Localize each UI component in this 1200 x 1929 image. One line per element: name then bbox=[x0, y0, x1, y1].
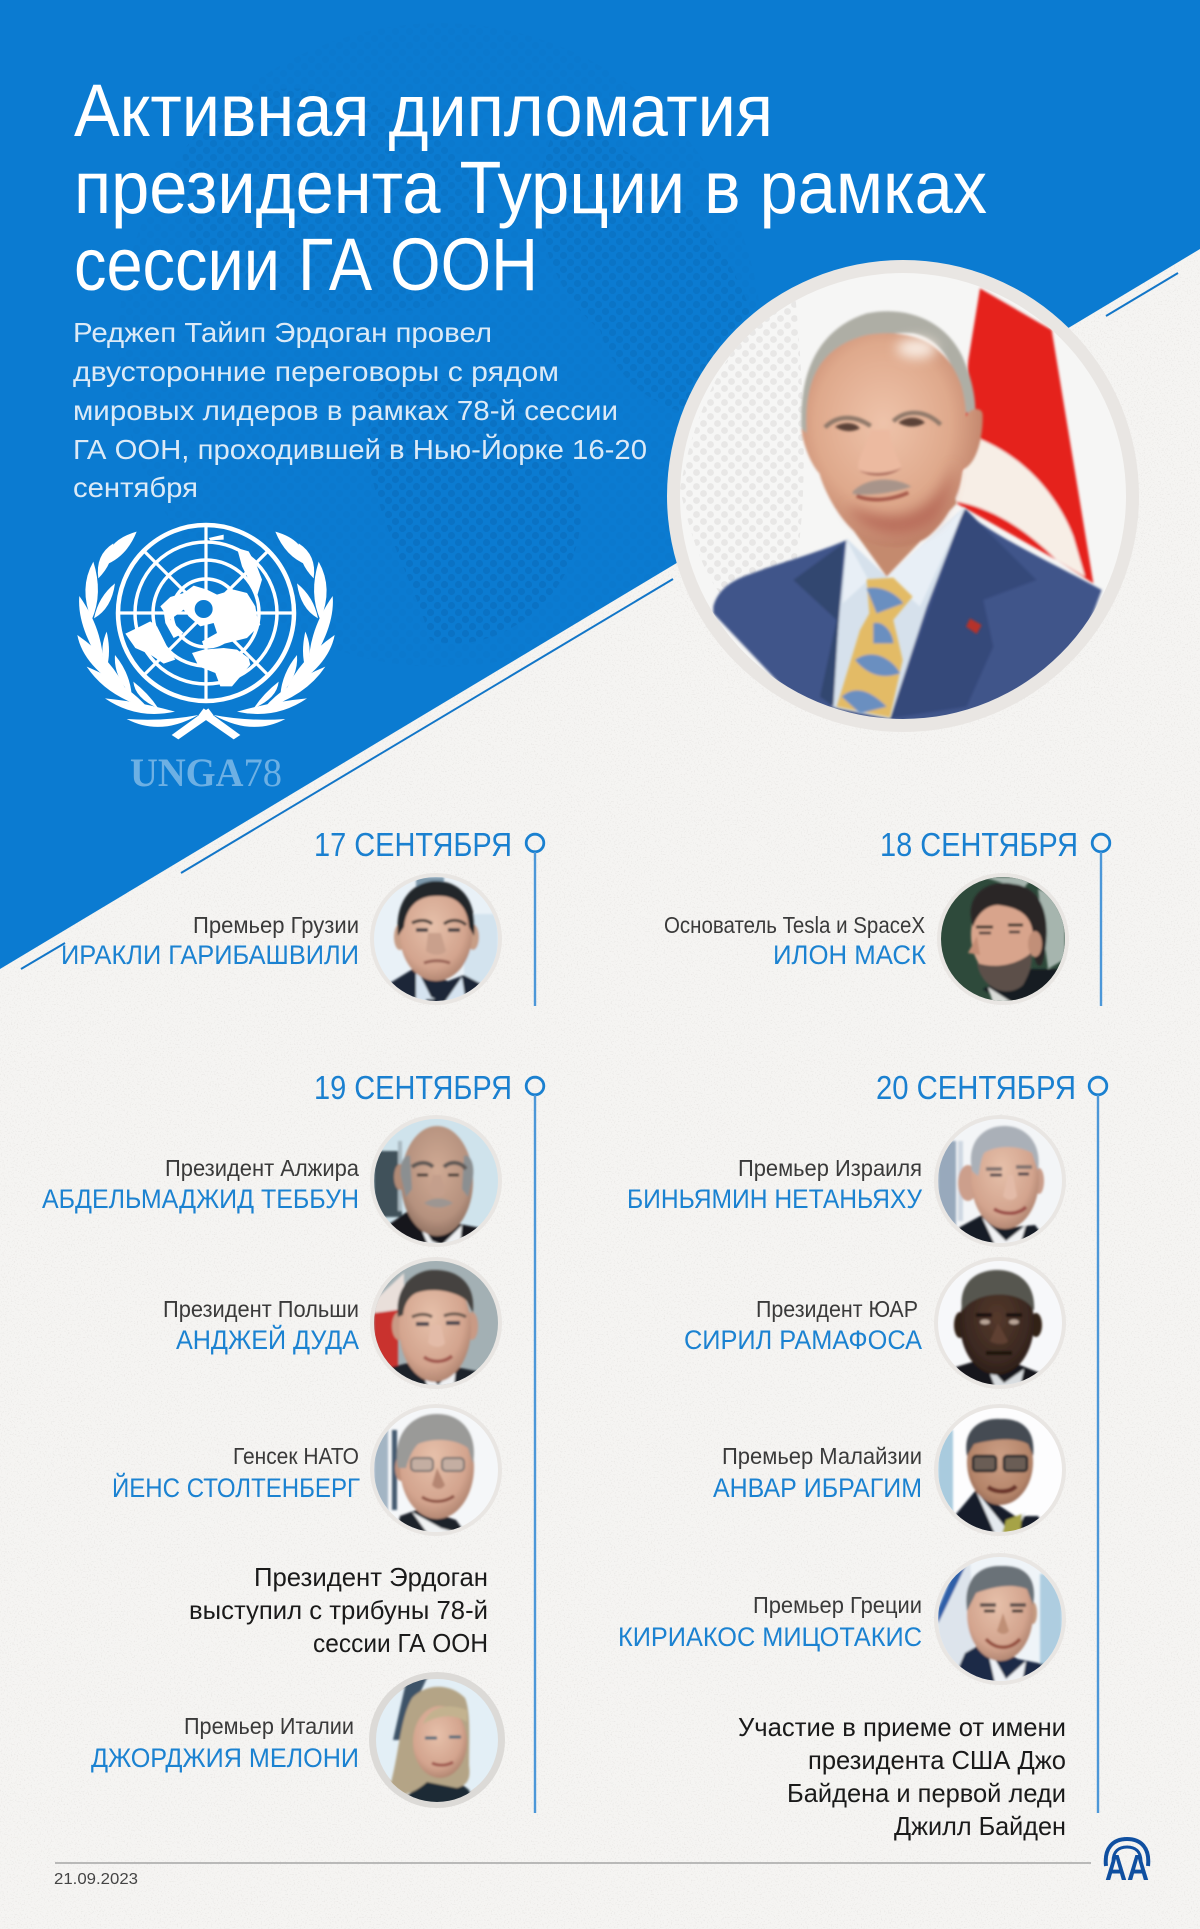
date: 17 September: 17 СЕНТЯБРЯ bbox=[314, 826, 512, 863]
UNGA78 label: UNGA78 bbox=[130, 750, 282, 795]
entry: Anwar Ibrahim bbox=[713, 1404, 1066, 1536]
entry: Duda: АНДЖЕЙ ДУДА bbox=[176, 1324, 359, 1355]
text: Biden reception: Участие в приеме от имени bbox=[738, 1712, 1066, 1742]
icon: AA logo: AA bbox=[1105, 1847, 1149, 1888]
subtitle bbox=[73, 317, 647, 503]
footer date: 21.09.2023 bbox=[54, 1871, 138, 1888]
title: Активная дипломатия bbox=[74, 69, 773, 152]
entry: Ramaphosa bbox=[684, 1257, 1066, 1389]
entry: Ramaphosa: Президент ЮАР bbox=[756, 1296, 918, 1322]
title: президента Турции в рамках bbox=[74, 146, 987, 229]
portrait: Erdogan bbox=[667, 260, 1139, 733]
entry: Mitsotakis: КИРИАКОС МИЦОТАКИС bbox=[618, 1622, 922, 1652]
entry: Meloni: Премьер Италии bbox=[184, 1713, 354, 1739]
entry: Meloni: ДЖОРДЖИЯ МЕЛОНИ bbox=[91, 1743, 359, 1773]
icon: UN emblem bbox=[77, 525, 335, 739]
text: Biden reception: Джилл Байден bbox=[894, 1811, 1066, 1841]
text: Biden reception: президента США Джо bbox=[808, 1745, 1066, 1775]
entry: Musk bbox=[664, 873, 1069, 1005]
dotted globe background bbox=[183, 88, 749, 644]
entry: Tebboune: АБДЕЛЬМАДЖИД ТЕББУН bbox=[42, 1184, 359, 1214]
entry: Garibashvili: Премьер Грузии bbox=[193, 912, 359, 938]
entry: Meloni bbox=[91, 1672, 505, 1808]
entry: Duda: Президент Польши bbox=[163, 1296, 359, 1322]
entry: Netanyahu: БИНЬЯМИН НЕТАНЬЯХУ bbox=[627, 1184, 923, 1214]
title bbox=[74, 69, 987, 306]
text: Biden reception: Байдена и первой леди bbox=[787, 1778, 1066, 1808]
subtitle: сентября bbox=[73, 472, 198, 503]
entry: Netanyahu: Премьер Израиля bbox=[738, 1155, 922, 1181]
date: 18 September: 18 СЕНТЯБРЯ bbox=[880, 826, 1078, 863]
entry: Ramaphosa: СИРИЛ РАМАФОСА bbox=[684, 1325, 922, 1355]
entry: Tebboune bbox=[42, 1115, 502, 1247]
subtitle: ГА ООН, проходившей в Нью-Йорке 16-20 bbox=[73, 434, 647, 465]
date: 20 September bbox=[876, 1069, 1107, 1813]
date: 19 September: 19 СЕНТЯБРЯ bbox=[314, 1069, 512, 1106]
subtitle: двусторонние переговоры с рядом bbox=[73, 356, 559, 387]
entry: Stoltenberg bbox=[112, 1404, 502, 1536]
entry: Garibashvili: ИРАКЛИ ГАРИБАШВИЛИ bbox=[61, 940, 359, 970]
entry: Netanyahu bbox=[627, 1115, 1066, 1247]
entry: Garibashvili bbox=[61, 873, 502, 1005]
entry: Anwar Ibrahim: АНВАР ИБРАГИМ bbox=[713, 1473, 922, 1503]
footer rule bbox=[55, 1862, 1091, 1864]
subtitle: Реджеп Тайип Эрдоган провел bbox=[73, 317, 492, 348]
entry: Musk: Основатель Tesla и SpaceX bbox=[664, 912, 925, 938]
entry: Duda bbox=[163, 1257, 502, 1389]
text: Erdogan UN speech: Президент Эрдоган bbox=[254, 1562, 488, 1592]
date: 17 September bbox=[314, 826, 544, 1006]
text: Erdogan UN speech bbox=[189, 1562, 488, 1658]
entry: Stoltenberg: ЙЕНС СТОЛТЕНБЕРГ bbox=[112, 1472, 360, 1503]
accent lines bbox=[21, 273, 1178, 969]
entry: Musk: ИЛОН МАСК bbox=[773, 940, 926, 970]
blue diagonal header panel bbox=[0, 0, 1200, 969]
entry: Mitsotakis bbox=[618, 1553, 1066, 1685]
subtitle: мировых лидеров в рамках 78-й сессии bbox=[73, 395, 618, 426]
entry: Tebboune: Президент Алжира bbox=[165, 1155, 359, 1181]
entry: Mitsotakis: Премьер Греции bbox=[753, 1592, 922, 1618]
date: 20 September: 20 СЕНТЯБРЯ bbox=[876, 1069, 1076, 1106]
title: сессии ГА ООН bbox=[74, 223, 538, 306]
text: Erdogan UN speech: выступил с трибуны 78-й bbox=[189, 1595, 488, 1625]
text: Biden reception bbox=[738, 1712, 1066, 1841]
entry: Stoltenberg: Генсек НАТО bbox=[233, 1443, 359, 1469]
entry: Anwar Ibrahim: Премьер Малайзии bbox=[722, 1443, 922, 1469]
date: 18 September bbox=[880, 826, 1110, 1006]
text: Erdogan UN speech: сессии ГА ООН bbox=[313, 1628, 488, 1658]
date: 19 September bbox=[314, 1069, 544, 1813]
